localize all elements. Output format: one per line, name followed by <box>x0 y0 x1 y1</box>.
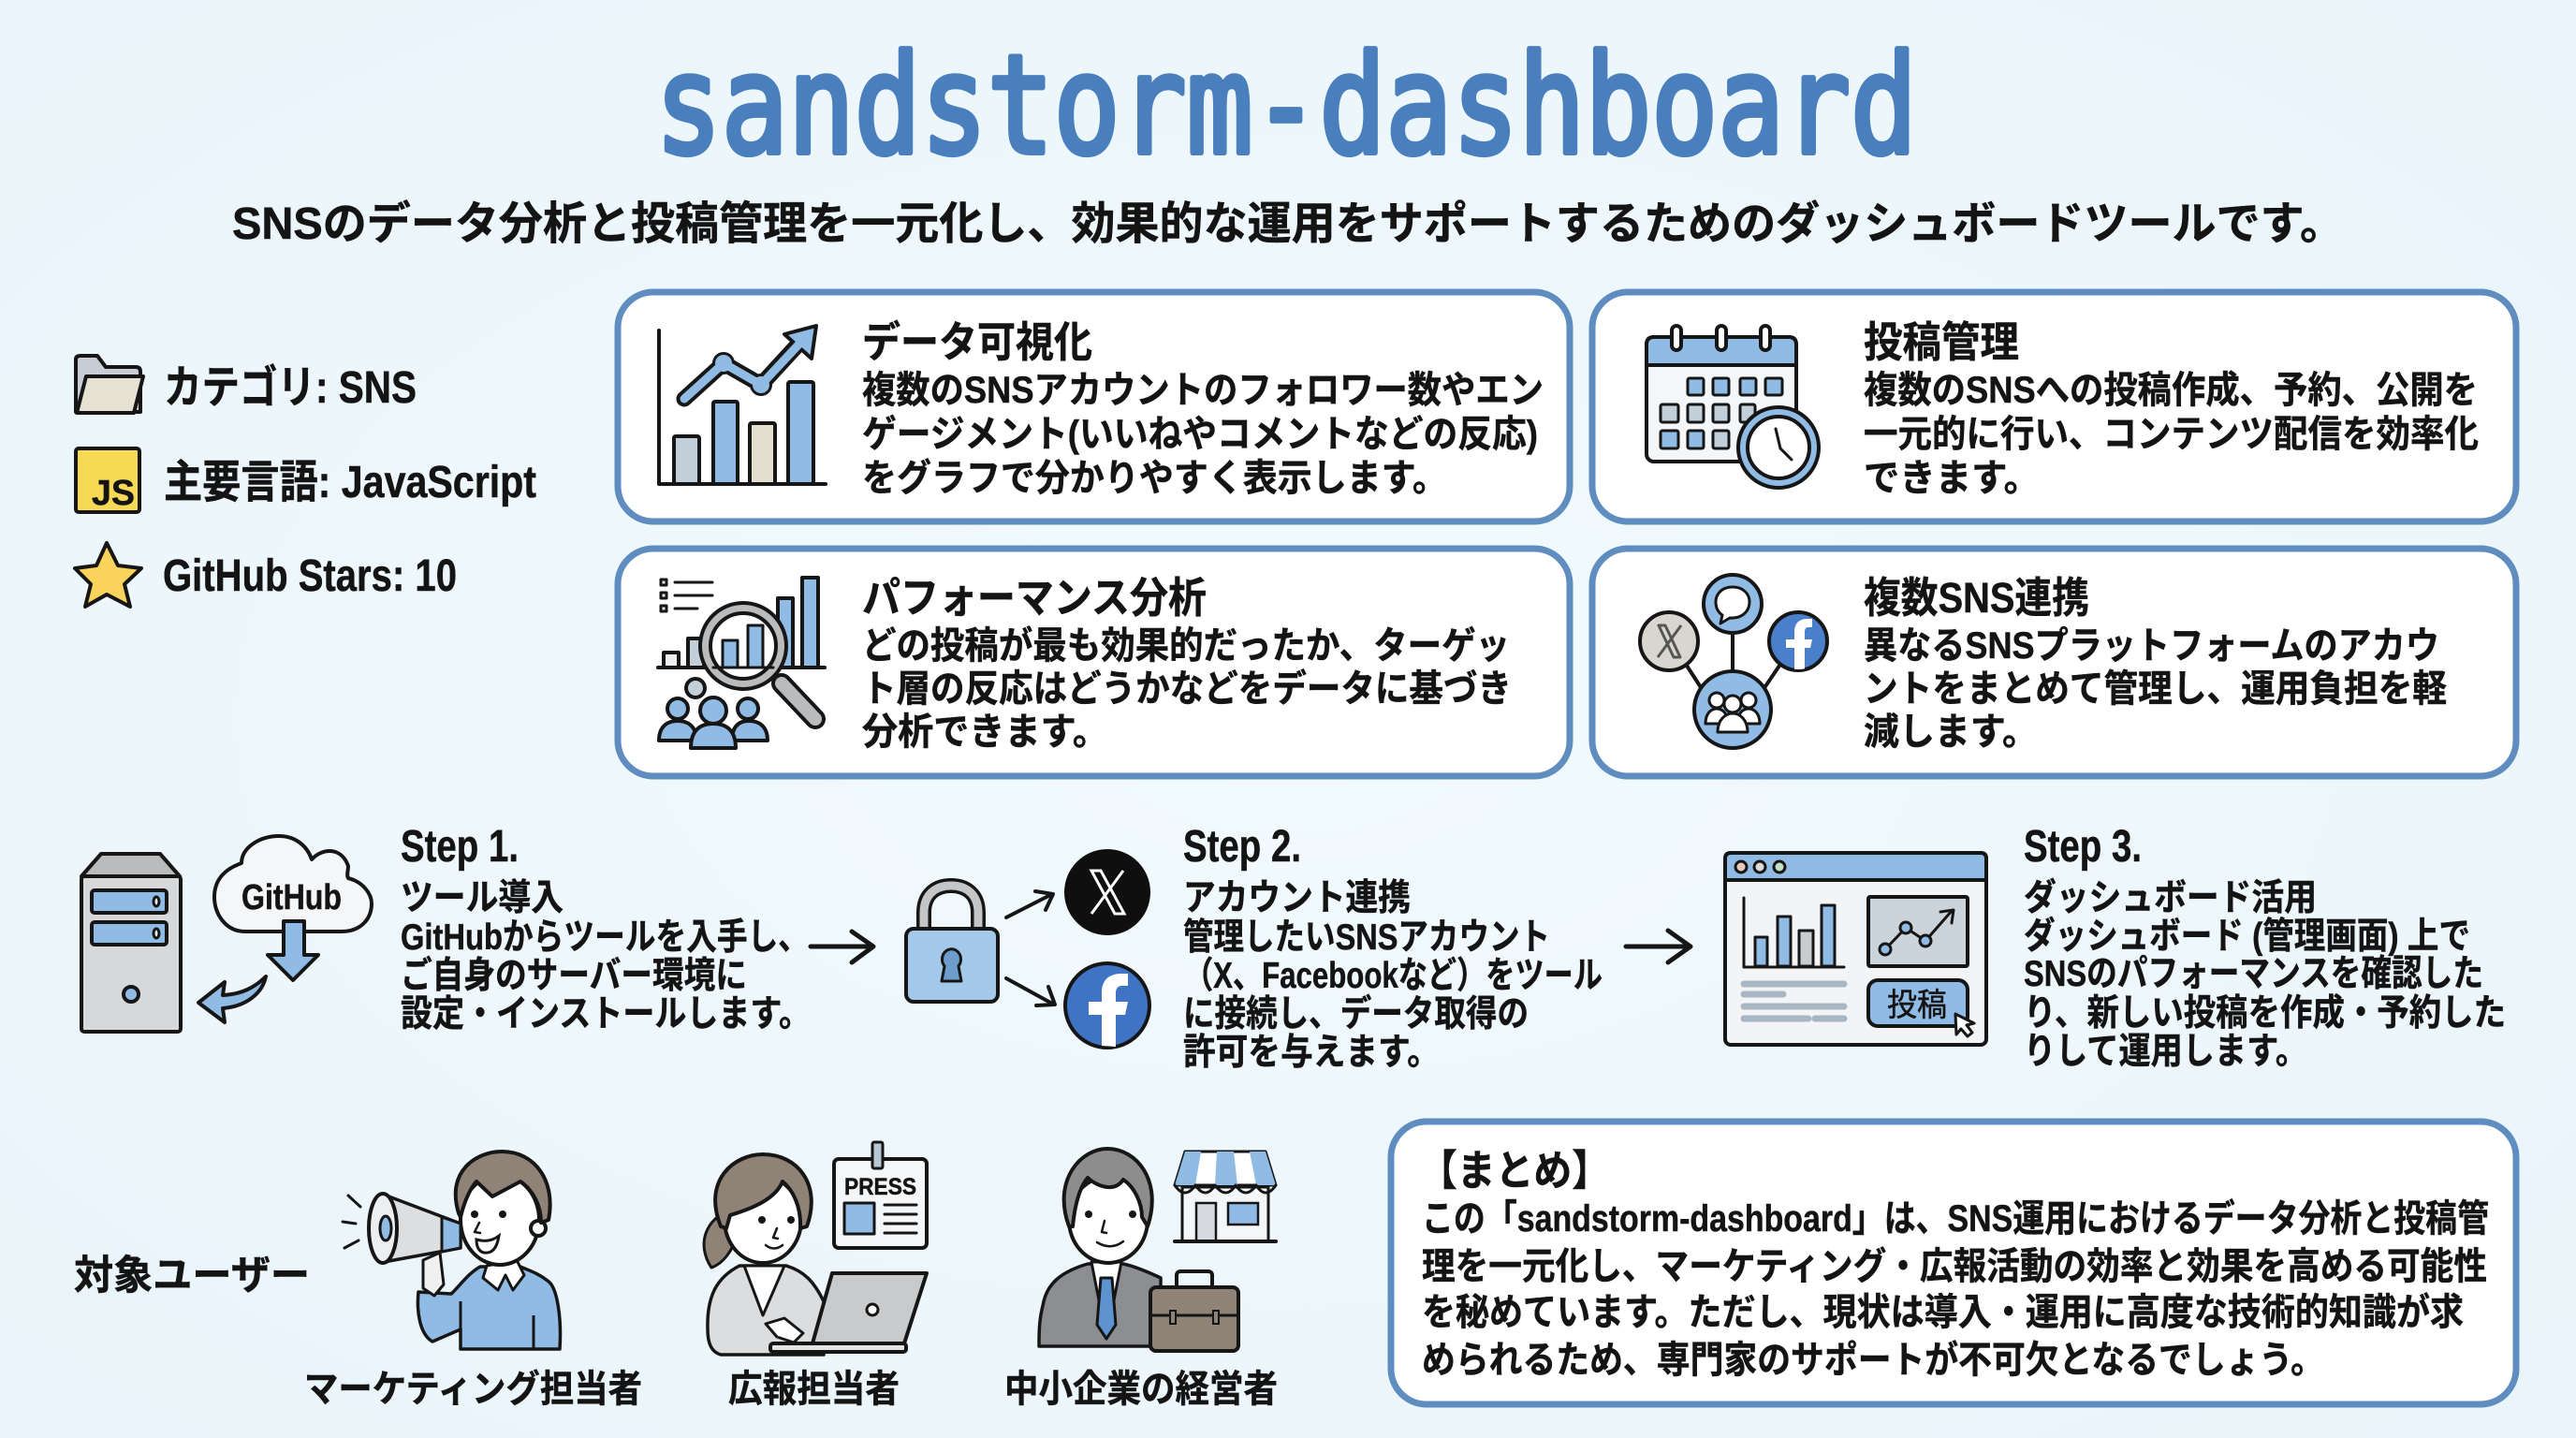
step 3 illustration: dashboard window <box>1725 853 1986 1045</box>
user: PR <box>704 1142 927 1410</box>
heading: 複数SNS連携 <box>1864 574 2089 622</box>
icon: person with press badge and laptop: PRESS <box>844 1174 916 1200</box>
panel: summary <box>1391 1122 2516 1404</box>
icon: chart with rising arrow <box>659 326 826 484</box>
step 1 text: ツール導入 <box>401 878 564 918</box>
label: stars: GitHub Stars: 10 <box>163 551 457 601</box>
icon: JavaScript: JS <box>92 474 135 513</box>
step 2 illustration: lock and SNS logos <box>906 849 1150 1048</box>
label: 中小企業の経営者 <box>1004 1369 1278 1410</box>
text block: 減します。 <box>1864 712 2038 753</box>
heading: 投稿管理 <box>1864 318 2019 366</box>
target users heading: 対象ユーザー <box>74 1254 310 1299</box>
subtitle: SNSのデータ分析と投稿管理を一元化し、効果的な運用をサポートするためのダッシュボードツールです。 <box>232 199 2344 249</box>
step 2 text: （X、Facebookなど）をツール <box>1184 956 1603 996</box>
icon: Facebook logo <box>1065 963 1149 1048</box>
step 3 text: りして運用します。 <box>2024 1032 2307 1072</box>
arrow: to Facebook <box>1006 978 1055 1005</box>
text block: 分析できます。 <box>862 712 1108 753</box>
text block: をグラフで分かりやすく表示します。 <box>862 458 1447 499</box>
heading: パフォーマンス分析 <box>862 574 1207 622</box>
text block: 異なるSNSプラットフォームのアカウ <box>1864 625 2439 667</box>
text block: められるため、専門家のサポートが不可欠となるでしょう。 <box>1422 1340 2324 1381</box>
step 1 illustration: server and GitHub cloud <box>81 836 372 1032</box>
text block <box>862 625 1512 753</box>
icon: server <box>81 854 181 1032</box>
icon: GitHub cloud: GitHub <box>242 878 342 917</box>
text block <box>1864 370 2479 499</box>
icon: X logo <box>1064 849 1150 935</box>
panel: data visualization <box>618 292 1570 521</box>
icon: businessperson with briefcase and store <box>1039 1149 1276 1351</box>
step 3 text <box>2024 822 2506 1072</box>
text block: どの投稿が最も効果的だったか、ターゲッ <box>862 625 1510 667</box>
label: category: カテゴリ: SNS <box>164 363 417 413</box>
text block <box>1422 1197 2489 1381</box>
title: sandstorm-dashboard <box>655 26 1917 185</box>
text block: 一元的に行い、コンテンツ配信を効率化 <box>1864 414 2479 455</box>
icon: person with megaphone <box>343 1152 560 1349</box>
icon: magnifier over chart and audience <box>658 578 825 748</box>
text block <box>862 370 1544 499</box>
text block: 複数のSNSへの投稿作成、予約、公開を <box>1864 370 2478 411</box>
icon: calendar and clock <box>1647 326 1819 488</box>
step 2 text: 許可を与えます。 <box>1183 1033 1440 1073</box>
arrow: step 2 to step 3 <box>1626 931 1690 962</box>
step 3 text: Step 3. <box>2024 822 2142 872</box>
text block <box>1864 625 2447 753</box>
arrow: step 1 to step 2 <box>811 932 873 962</box>
icon: SNS network <box>1640 575 1827 748</box>
panel: post management <box>1592 292 2516 521</box>
step 2 text <box>1183 822 1603 1073</box>
label: マーケティング担当者 <box>304 1369 642 1410</box>
text block: ゲージメント(いいねやコメントなどの反応) <box>862 414 1538 455</box>
heading: 【まとめ】 <box>1419 1147 1610 1195</box>
step 2 text: 管理したいSNSアカウント <box>1183 917 1550 958</box>
step 3 text: ダッシュボード活用 <box>2024 878 2317 918</box>
step 2 text: に接続し、データ取得の <box>1183 993 1529 1034</box>
icon: lock <box>906 886 998 1002</box>
icon: GitHub cloud <box>214 836 372 932</box>
meta: category <box>76 356 417 413</box>
step 2 text: Step 2. <box>1183 822 1301 872</box>
step 1 text: ご自身のサーバー環境に <box>401 956 747 996</box>
text block: 複数のSNSアカウントのフォロワー数やエン <box>862 370 1544 411</box>
label: 広報担当者 <box>728 1369 900 1410</box>
icon: folder <box>76 356 143 413</box>
icon: JavaScript <box>76 448 139 513</box>
text block: できます。 <box>1864 458 2040 499</box>
step 3 text: り、新しい投稿を作成・予約した <box>2024 993 2506 1034</box>
step 1 text: GitHubからツールを入手し、 <box>401 917 809 958</box>
heading: データ可視化 <box>862 318 1092 366</box>
step 1 text <box>401 822 811 1034</box>
meta: language <box>76 448 536 513</box>
text block: を秘めています。ただし、現状は導入・運用に高度な技術的知識が求 <box>1422 1292 2464 1333</box>
user: marketing <box>304 1152 642 1410</box>
panel: performance analysis <box>618 549 1570 776</box>
step 3 text: ダッシュボード (管理画面) 上で <box>2024 917 2470 957</box>
label: language: 主要言語: JavaScript <box>164 458 536 507</box>
icon: person with press badge and laptop <box>704 1142 927 1355</box>
step 3 text: SNSのパフォーマンスを確認した <box>2024 954 2483 994</box>
icon: star <box>75 543 141 607</box>
arrow: to X <box>1006 891 1053 917</box>
step 3 illustration: dashboard window: 投稿 <box>1887 988 1947 1023</box>
step 1 text: 設定・インストールします。 <box>401 994 811 1034</box>
panel: multi SNS integration <box>1592 549 2516 776</box>
icon: download arrow <box>268 921 318 980</box>
step 2 text: アカウント連携 <box>1183 878 1411 918</box>
step 1 text: Step 1. <box>401 822 519 872</box>
icon: install arrow <box>198 976 266 1022</box>
text block: ントをまとめて管理し、運用負担を軽 <box>1864 668 2447 710</box>
meta: stars <box>75 543 457 607</box>
text block: ト層の反応はどうかなどをデータに基づき <box>862 668 1512 710</box>
user: SME owner <box>1004 1149 1278 1410</box>
